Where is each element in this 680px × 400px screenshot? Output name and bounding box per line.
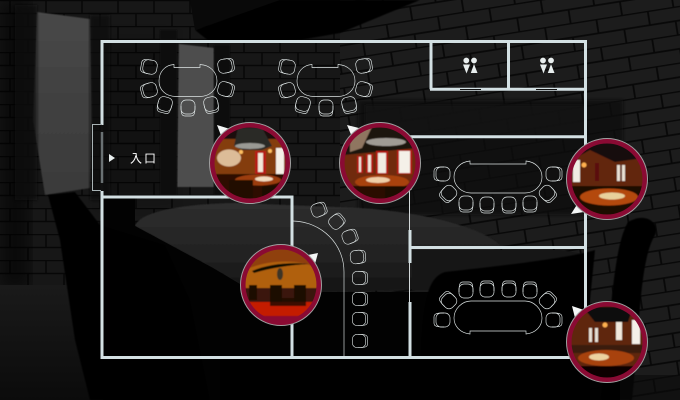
entrance door bbox=[92, 124, 102, 191]
photo marker 1 bbox=[210, 122, 290, 204]
icon: restroom 1 bbox=[463, 58, 478, 74]
table group: lower right bbox=[434, 281, 562, 334]
restroom door marks bbox=[460, 88, 557, 90]
floor plan walls bbox=[102, 41, 586, 358]
entrance label bbox=[109, 152, 158, 166]
curved counter with seats bbox=[293, 201, 368, 357]
photo marker 3 bbox=[566, 138, 648, 220]
photo marker 5 bbox=[566, 302, 648, 382]
table group: upper left bbox=[139, 58, 236, 116]
text: entrance: 入口 bbox=[130, 152, 158, 166]
photo marker 2 bbox=[340, 122, 420, 204]
sliding doors bbox=[408, 190, 410, 302]
icon: entrance arrow bbox=[109, 154, 115, 162]
table group: upper middle bbox=[277, 58, 374, 116]
photo marker 4 bbox=[240, 244, 322, 326]
icon: restroom 2 bbox=[540, 58, 554, 74]
table group: right middle bbox=[434, 161, 562, 213]
